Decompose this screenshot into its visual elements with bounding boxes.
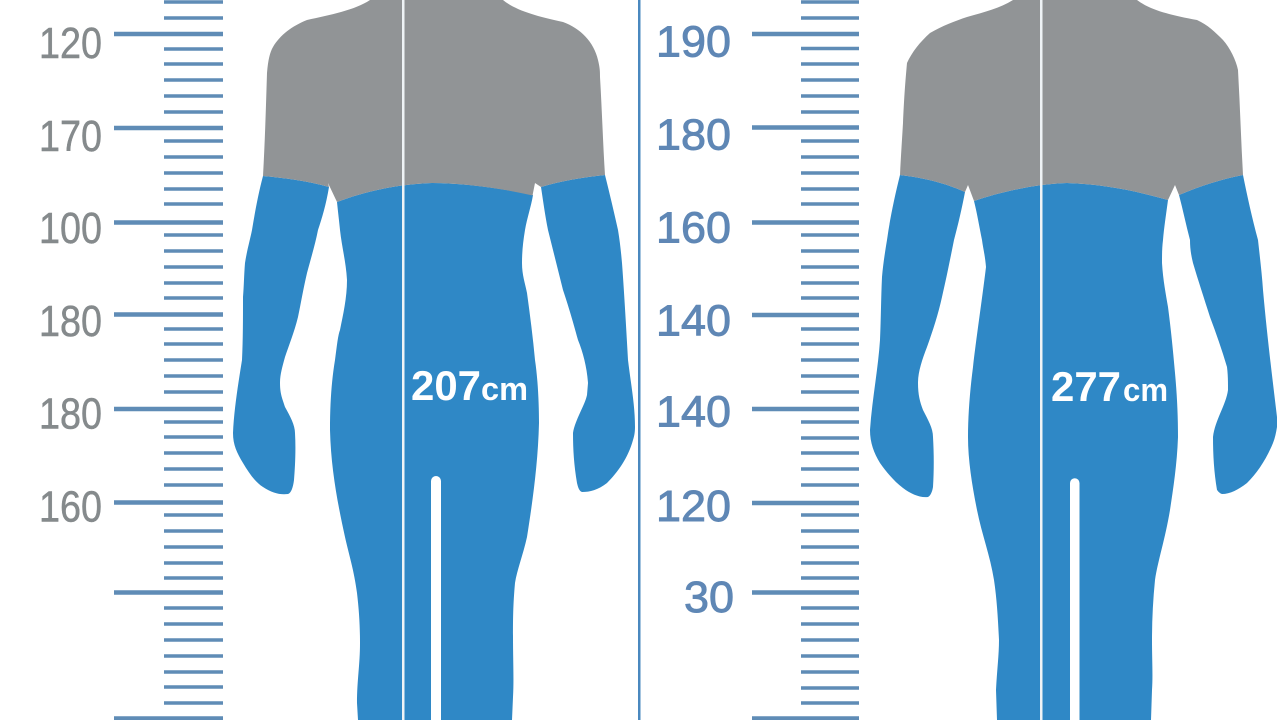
right arm, blue — [1179, 175, 1277, 494]
scale labels: 180 — [39, 390, 102, 438]
right body silhouette — [870, 0, 1277, 720]
shoulders and chest, grey — [900, 0, 1243, 201]
body measurement label — [1051, 363, 1168, 410]
scale labels: 120 — [39, 19, 102, 68]
center line — [1040, 0, 1042, 720]
left panel: height scale — [39, 2, 223, 718]
scale labels: 170 — [39, 112, 102, 161]
scale labels: 160 — [39, 482, 102, 532]
shoulders and chest, grey — [263, 0, 605, 202]
body measurement label: 207 — [411, 362, 481, 409]
scale labels — [656, 18, 734, 622]
body measurement label: 277 — [1051, 363, 1121, 410]
right arm, blue — [541, 175, 635, 492]
left arm, blue — [870, 175, 965, 497]
torso and legs, blue — [330, 183, 539, 720]
scale labels: 180 — [39, 297, 102, 346]
left body silhouette — [233, 0, 635, 720]
scale labels: 180 — [656, 110, 731, 160]
torso and legs, blue — [968, 183, 1178, 720]
body measurement label: cm — [481, 371, 528, 407]
right panel: height scale — [656, 2, 859, 718]
scale ticks — [752, 2, 859, 718]
scale labels: 140 — [656, 296, 731, 346]
scale labels: 100 — [39, 204, 102, 253]
scale labels — [39, 19, 102, 532]
panel divider line — [638, 0, 640, 720]
left arm, blue — [233, 176, 329, 494]
scale labels: 120 — [656, 482, 731, 531]
scale labels: 190 — [656, 18, 731, 66]
body measurement label: cm — [1123, 372, 1168, 408]
body measurement label — [411, 362, 528, 409]
scale ticks — [114, 2, 223, 718]
scale labels: 30 — [684, 573, 734, 622]
center line — [402, 0, 404, 720]
scale labels: 160 — [656, 204, 731, 252]
scale labels: 140 — [656, 388, 731, 436]
